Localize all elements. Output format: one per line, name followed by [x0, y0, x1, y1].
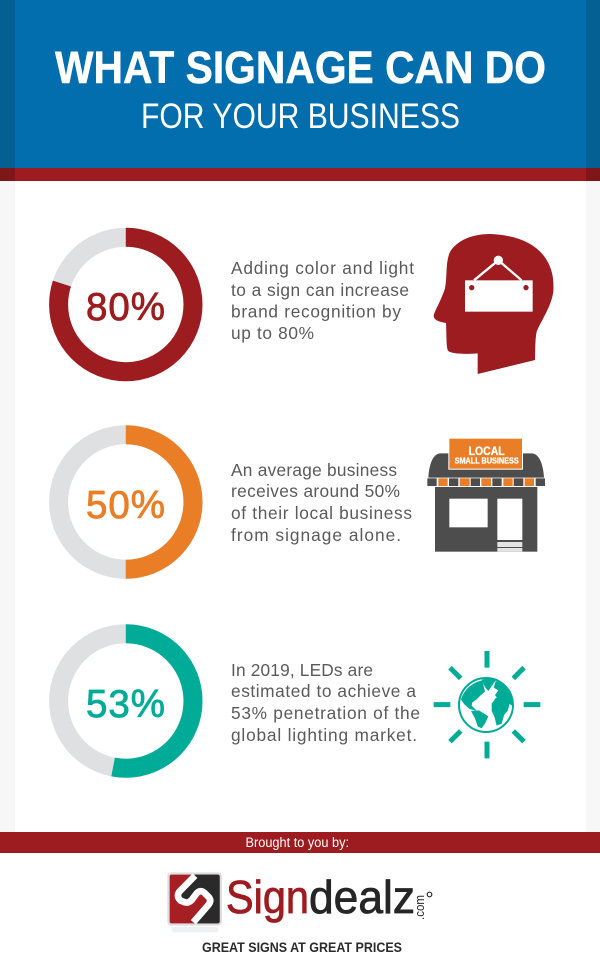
text: LED penetration — [231, 660, 420, 745]
title: WHAT SIGNAGE CAN DO — [55, 42, 546, 93]
text: brand recognition: up to 80% — [231, 323, 314, 343]
icon: storefront: LOCAL — [469, 445, 505, 458]
icon: head with hanging sign — [434, 234, 553, 374]
footer banner — [0, 832, 600, 853]
text: LED penetration: 53% penetration of the — [231, 703, 420, 723]
wordmark: Sign — [226, 871, 309, 923]
text: local business: receives around 50% — [231, 481, 400, 501]
icon: storefront: SMALL BUSINESS — [455, 455, 519, 465]
text: brand recognition: brand recognition by — [231, 302, 401, 322]
text: local business: of their local business — [231, 503, 412, 523]
text: LED penetration: In 2019, LEDs are — [231, 660, 373, 680]
icon: glowing globe — [434, 651, 540, 758]
panel: 80 percent statistic — [59, 234, 553, 374]
logo: Signdealz: dealz — [309, 871, 415, 923]
text: brand recognition — [231, 258, 414, 343]
text: local business: An average business — [231, 460, 397, 480]
subtitle: FOR YOUR BUSINESS — [141, 97, 460, 136]
panel: 53 percent statistic — [59, 634, 540, 768]
text: local business — [231, 460, 412, 545]
text: brand recognition: to a sign can increase — [231, 280, 409, 300]
footer banner: Brought to you by: — [246, 835, 349, 850]
donut chart: 53% — [59, 634, 193, 768]
logo: Signdealz — [167, 871, 432, 955]
logo: Signdealz: .com — [412, 895, 427, 920]
donut chart: 53%: 53% — [86, 683, 165, 726]
icon: logo mark — [167, 872, 222, 932]
tagline: GREAT SIGNS AT GREAT PRICES — [202, 939, 402, 955]
text: brand recognition: Adding color and light — [231, 258, 414, 278]
donut chart: 80% — [59, 237, 193, 372]
text: LED penetration: global lighting market. — [231, 725, 417, 745]
icon: storefront — [427, 438, 545, 552]
text: LED penetration: estimated to achieve a — [231, 681, 416, 701]
donut chart: 50% — [59, 435, 193, 569]
donut chart: 50%: 50% — [86, 484, 165, 527]
header banner — [0, 0, 600, 181]
panel: 50 percent statistic — [59, 435, 545, 569]
donut chart: 80%: 80% — [86, 286, 165, 329]
text: local business: from signage alone. — [231, 525, 401, 545]
